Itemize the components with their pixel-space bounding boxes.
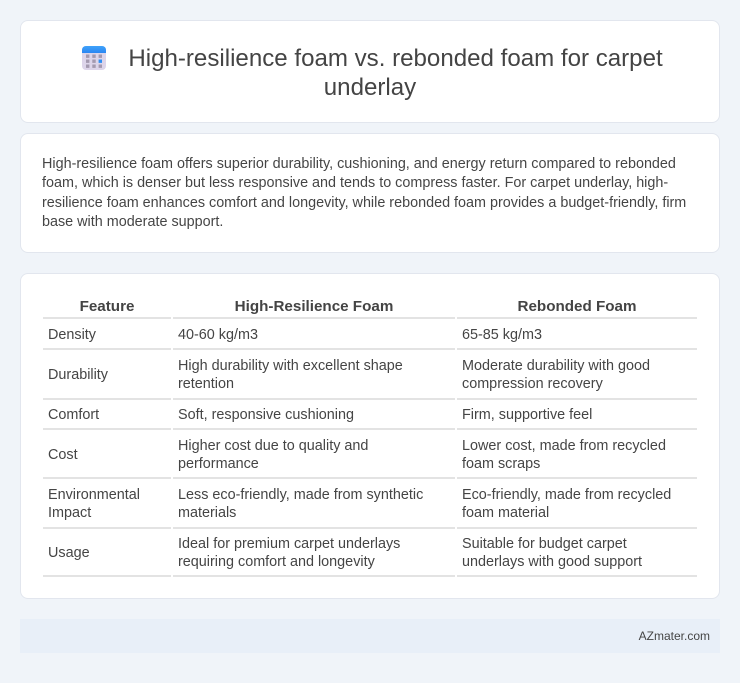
row: Usage: underlays with good support (462, 554, 642, 570)
row: Cost (48, 438, 666, 472)
heading: title: underlay (324, 74, 416, 101)
row: Durability (48, 358, 650, 392)
row: Cost: performance (178, 456, 259, 472)
row: Cost: Cost (48, 447, 78, 463)
panel: comparison table (20, 273, 720, 599)
row: Environmental Impact: materials (178, 505, 236, 521)
row: Environmental Impact: Less eco-friendly, made from synthetic (178, 487, 423, 503)
text block: introduction: base with moderate support. (42, 214, 223, 230)
row: Comfort: Firm, supportive feel (462, 407, 592, 423)
row: Usage: Suitable for budget carpet (462, 536, 627, 552)
row: Durability: Moderate durability with good (462, 358, 650, 374)
row: Density (48, 327, 542, 343)
heading: title (128, 45, 663, 101)
row: Durability: retention (178, 376, 234, 392)
row: Durability: High durability with excellent shape (178, 358, 403, 374)
row: Usage: requiring comfort and longevity (178, 554, 375, 570)
row: Density: Density (48, 327, 96, 343)
text block: introduction: foam, which is denser but less responsive and tends to compress faster. For carpet underlay, high- (42, 175, 668, 191)
row: Environmental Impact (48, 487, 671, 521)
panel: introduction text (20, 133, 720, 253)
row: Comfort (48, 407, 592, 423)
row: Density: 40-60 kg/m3 (178, 327, 258, 343)
row: Environmental Impact: foam material (462, 505, 549, 521)
text block: introduction: High-resilience foam offers superior durability, cushioning, and energy return compared to rebonded (42, 156, 676, 172)
row: Usage (48, 536, 642, 570)
row: Comfort: Comfort (48, 407, 99, 423)
panel: title card (20, 20, 720, 123)
row: Environmental Impact: Impact (48, 505, 91, 521)
row: Usage: Usage (48, 545, 90, 561)
row: Environmental Impact: Eco-friendly, made from recycled (462, 487, 671, 503)
row: Environmental Impact: Environmental (48, 487, 140, 503)
icon: calendar (82, 46, 106, 70)
table header: High-Resilience Foam: High-Resilience Foam (235, 298, 393, 315)
footer bar (20, 619, 720, 653)
row: Cost: foam scraps (462, 456, 540, 472)
table header: Feature: Feature (80, 298, 134, 315)
footer text: AZmater.com: AZmater.com (639, 629, 710, 643)
row: Cost: Higher cost due to quality and (178, 438, 368, 454)
table header: Rebonded Foam: Rebonded Foam (518, 298, 636, 315)
text block: introduction (42, 156, 686, 230)
row: Durability: Durability (48, 367, 108, 383)
row: Comfort: Soft, responsive cushioning (178, 407, 354, 423)
text block: introduction: resilience foam enhances comfort and longevity, while rebonded foam provides a budget-friendly, firm (42, 195, 686, 211)
row: Usage: Ideal for premium carpet underlays (178, 536, 400, 552)
row: Durability: compression recovery (462, 376, 603, 392)
row: Density: 65-85 kg/m3 (462, 327, 542, 343)
row: Cost: Lower cost, made from recycled (462, 438, 666, 454)
heading: title: High-resilience foam vs. rebonded foam for carpet (128, 45, 663, 72)
